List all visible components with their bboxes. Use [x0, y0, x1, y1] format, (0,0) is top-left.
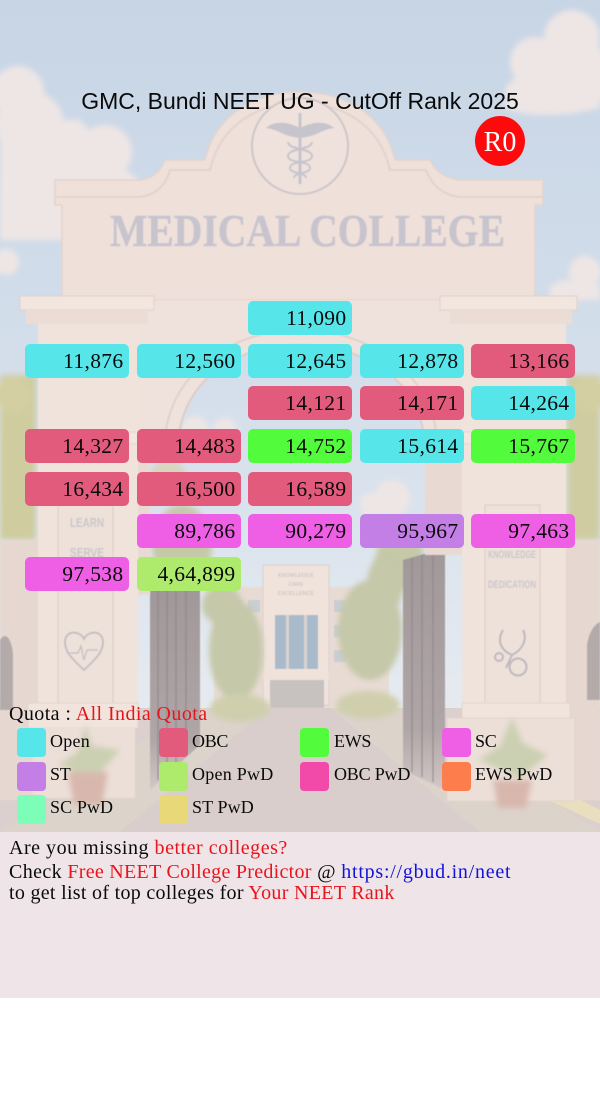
rank 97,538	[25, 557, 128, 591]
rank 16,500: 16,500	[174, 477, 236, 501]
rank 12,645	[248, 344, 352, 378]
rank 12,878	[360, 344, 464, 378]
legend swatch: Open	[17, 728, 46, 757]
legend label: OBC PwD: OBC PwD	[334, 764, 410, 784]
upper building pediment: MEDICAL COLLEGE	[110, 205, 505, 256]
promo text: top colleges for your rank: to get list of top colleges for Your NEET Rank	[9, 882, 395, 904]
rank 14,171	[360, 386, 464, 420]
central hospital building: EXCELLENCE	[278, 591, 315, 597]
rank 11,876: 11,876	[63, 349, 124, 373]
rank 97,463: 97,463	[508, 519, 570, 543]
rank 14,264	[471, 386, 574, 420]
rank 90,279	[248, 514, 352, 548]
side trees and walls	[0, 375, 600, 800]
round badge R0: R0	[484, 127, 516, 158]
arch	[137, 300, 463, 595]
rank 4,64,899	[137, 557, 240, 591]
rank 95,967	[360, 514, 464, 548]
legend swatch: SC	[442, 728, 471, 757]
rank 89,786	[137, 514, 240, 548]
card grid of cutoff ranks	[25, 301, 575, 591]
legend swatch: ST PwD	[159, 795, 188, 824]
iron gates	[150, 548, 445, 790]
quota heading: Quota : All India Quota	[9, 703, 208, 725]
rank 15,614: 15,614	[397, 434, 458, 458]
rank 16,434: 16,434	[62, 477, 124, 501]
rank 14,483: 14,483	[174, 434, 236, 458]
rank 16,589	[248, 472, 352, 506]
legend label: ST: ST	[50, 764, 70, 784]
rank 13,166	[471, 344, 574, 378]
rank 14,121	[248, 386, 352, 420]
promo text: missing better colleges: Are you missing better colleges?	[9, 837, 288, 859]
rank 12,560: 12,560	[174, 349, 236, 373]
rank 97,463	[471, 514, 574, 548]
legend swatch: OBC	[159, 728, 188, 757]
rank 14,752	[248, 429, 352, 463]
rank 12,560	[137, 344, 240, 378]
rank 15,767	[471, 429, 574, 463]
rank 14,752: 14,752	[285, 434, 346, 458]
legend swatch: SC PwD	[17, 795, 46, 824]
potted plants	[58, 717, 548, 808]
rank 11,876	[25, 344, 128, 378]
round badge R0	[475, 116, 525, 166]
rank 13,166: 13,166	[508, 349, 570, 373]
legend swatch: EWS	[300, 728, 329, 757]
legend	[17, 728, 552, 824]
avenue trees	[202, 555, 403, 722]
rank 14,327	[25, 429, 128, 463]
bottom promo panel background	[0, 832, 600, 998]
rank 97,538: 97,538	[62, 562, 124, 586]
rank 89,786: 89,786	[174, 519, 236, 543]
background illustration: medical college gate	[0, 0, 600, 832]
legend label: Open PwD: Open PwD	[192, 764, 274, 784]
legend swatch: EWS PwD	[442, 762, 471, 791]
clouds	[0, 10, 600, 517]
rank 11,090	[248, 301, 352, 335]
legend label: EWS PwD: EWS PwD	[475, 764, 552, 784]
legend label: EWS: EWS	[334, 731, 371, 751]
upper building pediment	[55, 92, 543, 300]
rank 14,327: 14,327	[62, 434, 124, 458]
central hospital building	[214, 565, 389, 712]
left pillar	[0, 296, 154, 800]
rank 15,767: 15,767	[508, 434, 570, 458]
legend label: Open: Open	[50, 731, 90, 751]
rank 16,589: 16,589	[285, 477, 346, 501]
central hospital building: KNOWLEDGE	[278, 573, 314, 579]
legend label: ST PwD: ST PwD	[192, 797, 254, 817]
left pillar: SERVE	[70, 545, 104, 560]
rank 4,64,899: 4,64,899	[157, 562, 236, 586]
legend label: SC PwD: SC PwD	[50, 797, 113, 817]
rank 11,090: 11,090	[286, 306, 346, 330]
rank 12,645: 12,645	[285, 349, 346, 373]
right pillar: KNOWLEDGE	[488, 549, 536, 561]
rank 12,878: 12,878	[397, 349, 458, 373]
rank 16,434	[25, 472, 128, 506]
rank 16,500	[137, 472, 240, 506]
rank 14,171: 14,171	[397, 391, 458, 415]
rank 14,264: 14,264	[508, 391, 570, 415]
ground and road	[0, 708, 600, 832]
promo text: college predictor link: Check Free NEET College Predictor @ https://gbud.in/neet	[9, 861, 511, 883]
central hospital building: CARE	[288, 582, 304, 588]
legend swatch: ST	[17, 762, 46, 791]
legend swatch: OBC PwD	[300, 762, 329, 791]
rank 95,967: 95,967	[397, 519, 458, 543]
rank 15,614	[360, 429, 464, 463]
title: GMC, Bundi NEET UG - CutOff Rank 2025	[81, 88, 519, 114]
legend swatch: Open PwD	[159, 762, 188, 791]
distant foliage behind arch	[150, 461, 424, 590]
sky	[0, 0, 600, 720]
right pillar	[440, 296, 600, 801]
rank 14,121: 14,121	[285, 391, 346, 415]
legend label: SC: SC	[475, 731, 496, 751]
legend label: OBC: OBC	[192, 731, 228, 751]
rank 90,279: 90,279	[285, 519, 346, 543]
left pillar: LEARN	[70, 515, 104, 530]
right pillar: DEDICATION	[488, 579, 536, 591]
rank 14,483	[137, 429, 240, 463]
